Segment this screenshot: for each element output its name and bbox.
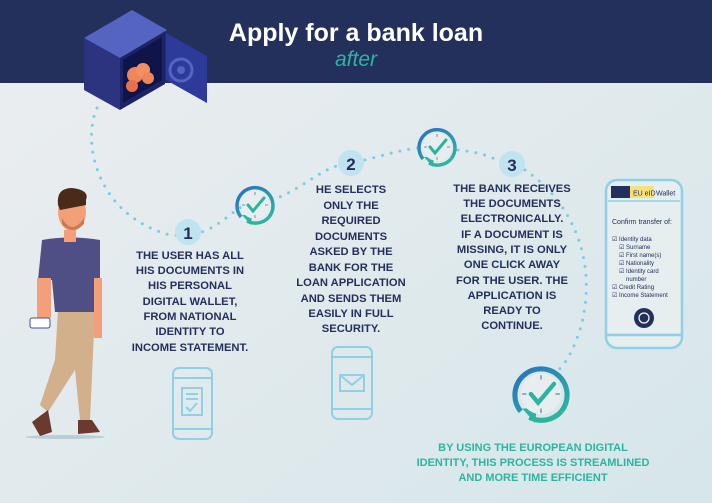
text: step 1: THE USER HAS ALL: [136, 250, 244, 262]
text: step 1: [132, 250, 248, 354]
text: step 2: LOAN APPLICATION: [296, 277, 406, 289]
step 2 number: [338, 150, 364, 176]
icon: clock big: [515, 369, 567, 423]
wallet phone: ☑ First name(s): [619, 252, 661, 259]
step 1 number: [175, 219, 201, 245]
wallet phone: ☑ Credit Rating: [612, 284, 654, 291]
icon: clock 2: [419, 130, 455, 167]
text: step 3: THE DOCUMENTS: [463, 198, 561, 210]
title: after: [335, 48, 378, 71]
text: step 2: ASKED BY THE: [309, 246, 393, 258]
dotted path: [92, 108, 586, 372]
text: step 3: CONTINUE.: [481, 320, 543, 332]
text: step 2: HE SELECTS: [316, 184, 387, 196]
step 3 number: [499, 151, 525, 177]
text: step 3: READY TO: [483, 305, 541, 317]
wallet phone: ☑ Nationality: [619, 260, 654, 267]
text: step 2: ONLY THE: [323, 200, 379, 212]
text: step 3: FOR THE USER. THE: [456, 275, 568, 287]
text: step 3: THE BANK RECEIVES: [453, 183, 571, 195]
text: step 1: DIGITAL WALLET,: [143, 296, 237, 308]
step 1 number: 1: [183, 224, 193, 243]
icon: phone document: [173, 368, 212, 439]
text: step 2: REQUIRED: [321, 215, 381, 227]
wallet phone: EU eID: [633, 190, 656, 198]
text: step 2: EASILY IN FULL: [308, 308, 394, 320]
wallet phone: Confirm transfer of:: [612, 219, 672, 226]
conclusion text: [417, 442, 649, 484]
wallet phone: ☑ Identity card: [619, 268, 659, 275]
wallet phone: number: [626, 277, 646, 283]
wallet phone: [606, 180, 682, 348]
icon: phone mail: [332, 347, 372, 419]
step 3 number: 3: [507, 156, 517, 175]
text: step 3: IF A DOCUMENT IS: [461, 229, 563, 241]
text: step 2: AND SENDS THEM: [301, 293, 401, 305]
icon: safe: [84, 10, 207, 110]
wallet phone: ☑ Identity data: [612, 236, 652, 243]
step 2 number: 2: [346, 155, 356, 174]
conclusion text: AND MORE TIME EFFICIENT: [458, 472, 608, 484]
text: step 1: HIS PERSONAL: [148, 280, 232, 292]
wallet phone: ☑ Income Statement: [612, 292, 668, 299]
header band: [0, 0, 712, 83]
text: step 3: APPLICATION IS: [468, 290, 557, 302]
text: step 2: BANK FOR THE: [309, 262, 394, 274]
text: step 1: INCOME STATEMENT.: [132, 342, 248, 354]
icon: clock 1: [237, 188, 273, 225]
text: step 3: ELECTRONICALLY.: [461, 213, 563, 225]
title: Apply for a bank loan: [229, 19, 483, 47]
wallet phone: ☑ Surname: [619, 244, 651, 251]
text: step 1: IDENTITY TO: [155, 326, 225, 338]
text: step 2: [296, 184, 406, 335]
title: [229, 19, 483, 71]
text: step 3: ONE CLICK AWAY: [464, 259, 561, 271]
text: step 2: SECURITY.: [322, 323, 380, 335]
wallet phone: Wallet: [656, 190, 675, 198]
text: step 3: MISSING, IT IS ONLY: [457, 244, 568, 256]
text: step 2: DOCUMENTS: [315, 231, 388, 243]
conclusion text: IDENTITY, THIS PROCESS IS STREAMLINED: [417, 457, 649, 469]
text: step 1: HIS DOCUMENTS IN: [136, 265, 244, 277]
text: step 1: FROM NATIONAL: [143, 311, 237, 323]
conclusion text: BY USING THE EUROPEAN DIGITAL: [438, 442, 628, 454]
text: step 3: [453, 183, 571, 332]
man illustration: [25, 188, 105, 439]
